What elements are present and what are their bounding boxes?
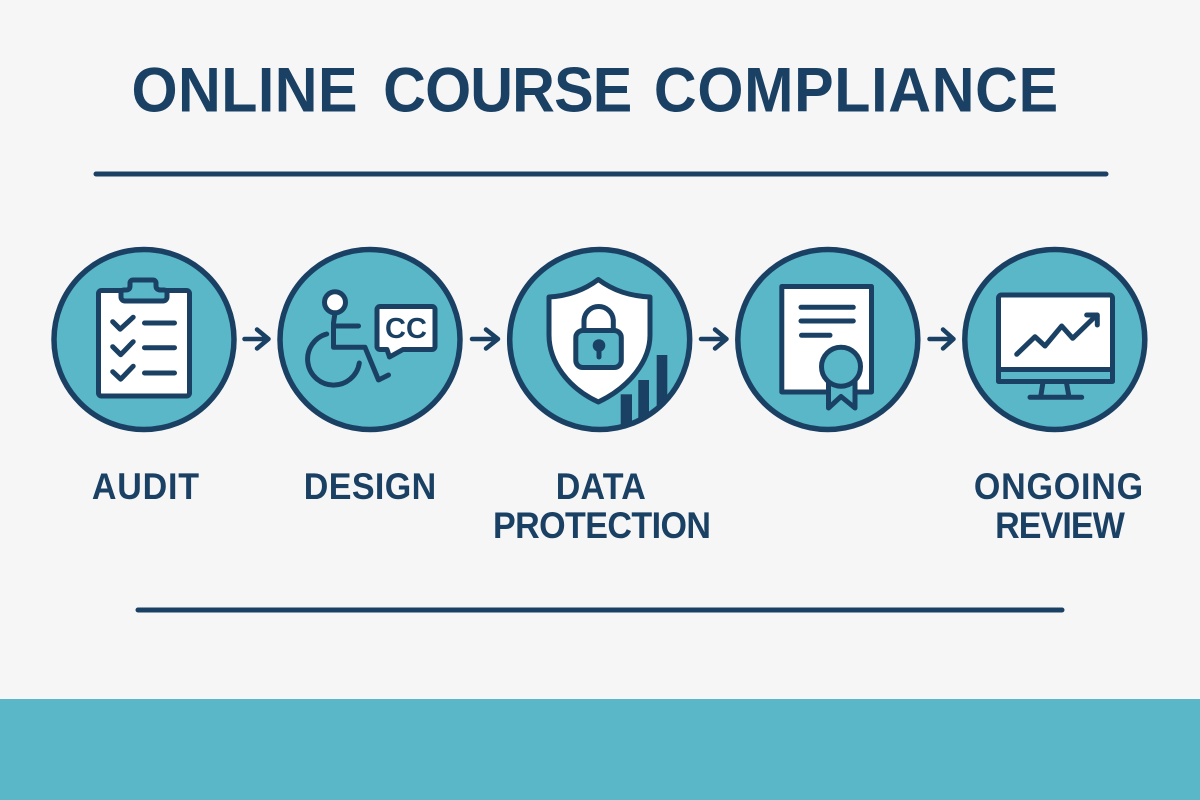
footer band [0,699,1200,800]
title [131,55,1058,125]
icon: wheelchair and captions [308,292,435,385]
title: COMPLIANCE [654,55,1058,125]
title: ONLINE [131,55,358,125]
step: ongoing review [965,250,1145,546]
title: COURSE [383,55,632,125]
arrow [701,330,726,348]
icon: signal bars [620,355,668,424]
step: audit [54,250,234,507]
arrow [472,330,498,348]
step: ongoing review: REVIEW [995,505,1125,546]
arrow [244,330,268,348]
icon: shield and padlock [549,280,650,402]
step: certificate [738,250,918,430]
step: data protection [493,250,711,546]
label: design: DESIGN [304,466,436,507]
step: design [280,250,460,507]
icon: monitor with trend line [998,295,1112,397]
label: data protection: DATA [556,466,646,507]
icon: clipboard checklist [98,280,190,396]
label: audit: AUDIT [92,466,199,507]
label: ongoing review: ONGOING [974,466,1143,507]
caption text: CC [385,313,427,345]
icon: certificate with ribbon [782,286,872,408]
arrow [930,330,954,348]
step: data protection: PROTECTION [493,505,711,546]
